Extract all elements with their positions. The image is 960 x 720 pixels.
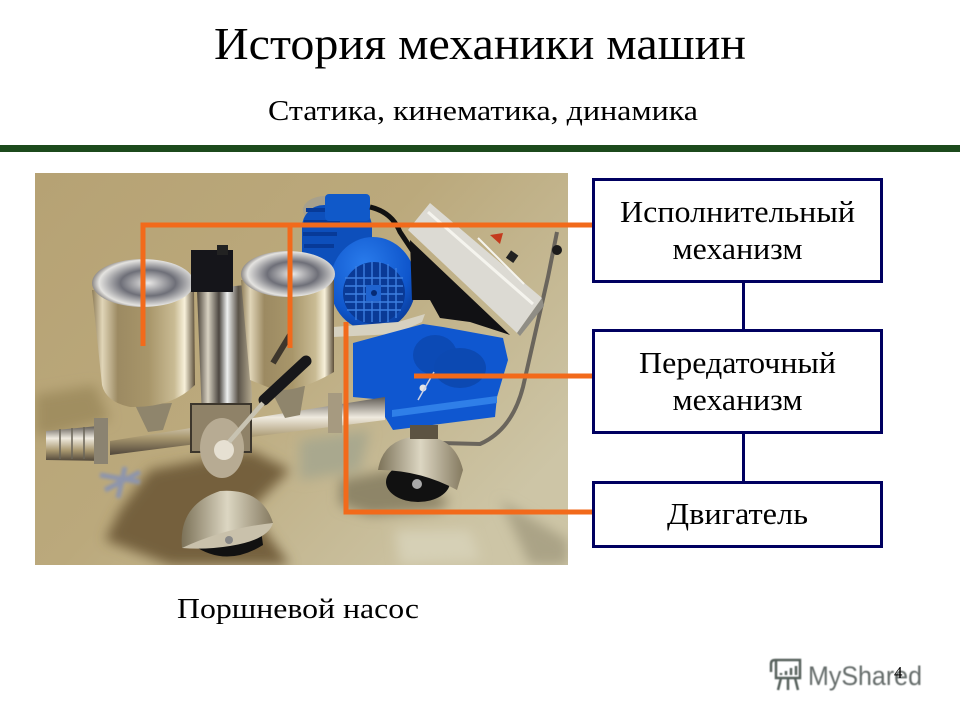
floor shadows: [35, 385, 568, 565]
outlet pipe: [46, 393, 385, 464]
black valve box: [191, 245, 233, 292]
pump handle: [229, 335, 306, 442]
photo: piston pump: [35, 173, 568, 565]
front wheel: [182, 491, 273, 556]
subtitle: Статика, кинематика, динамика: [268, 96, 699, 127]
box: transmission mechanism: механизм: [672, 382, 802, 417]
box: executive mechanism: Исполнительный: [620, 194, 855, 229]
left tank: [92, 259, 195, 432]
floor marks: [100, 467, 140, 498]
vertical connectors: [742, 281, 745, 483]
box: motor: Двигатель: [667, 496, 808, 531]
photo caption: Поршневой насос: [177, 594, 419, 625]
watermark logo: MyShared: [808, 661, 922, 691]
header rule: [0, 145, 960, 152]
orange leader lines: [143, 225, 593, 512]
centre chrome body: [191, 285, 252, 478]
right tank: [241, 251, 335, 418]
box: transmission mechanism: Передаточный: [639, 345, 836, 380]
motor: [302, 194, 425, 337]
box: executive mechanism: [594, 180, 882, 282]
black bracket: [410, 240, 510, 335]
box: motor: [594, 482, 882, 546]
leader: transmission: [414, 374, 593, 378]
rear wheel: [378, 425, 463, 502]
photo floor background: [35, 173, 568, 565]
title: История механики машин: [214, 18, 746, 69]
control box: [408, 203, 544, 336]
leader: motor: [346, 322, 593, 512]
cart handle: [440, 232, 562, 444]
page number: 4: [894, 663, 903, 682]
icon: presentation board: [771, 660, 800, 690]
box: transmission mechanism: [594, 330, 882, 432]
box: executive mechanism: механизм: [672, 231, 802, 266]
blue gear housing: [353, 324, 508, 430]
leader: executive mechanism: [143, 225, 593, 348]
watermark logo: [771, 660, 922, 691]
